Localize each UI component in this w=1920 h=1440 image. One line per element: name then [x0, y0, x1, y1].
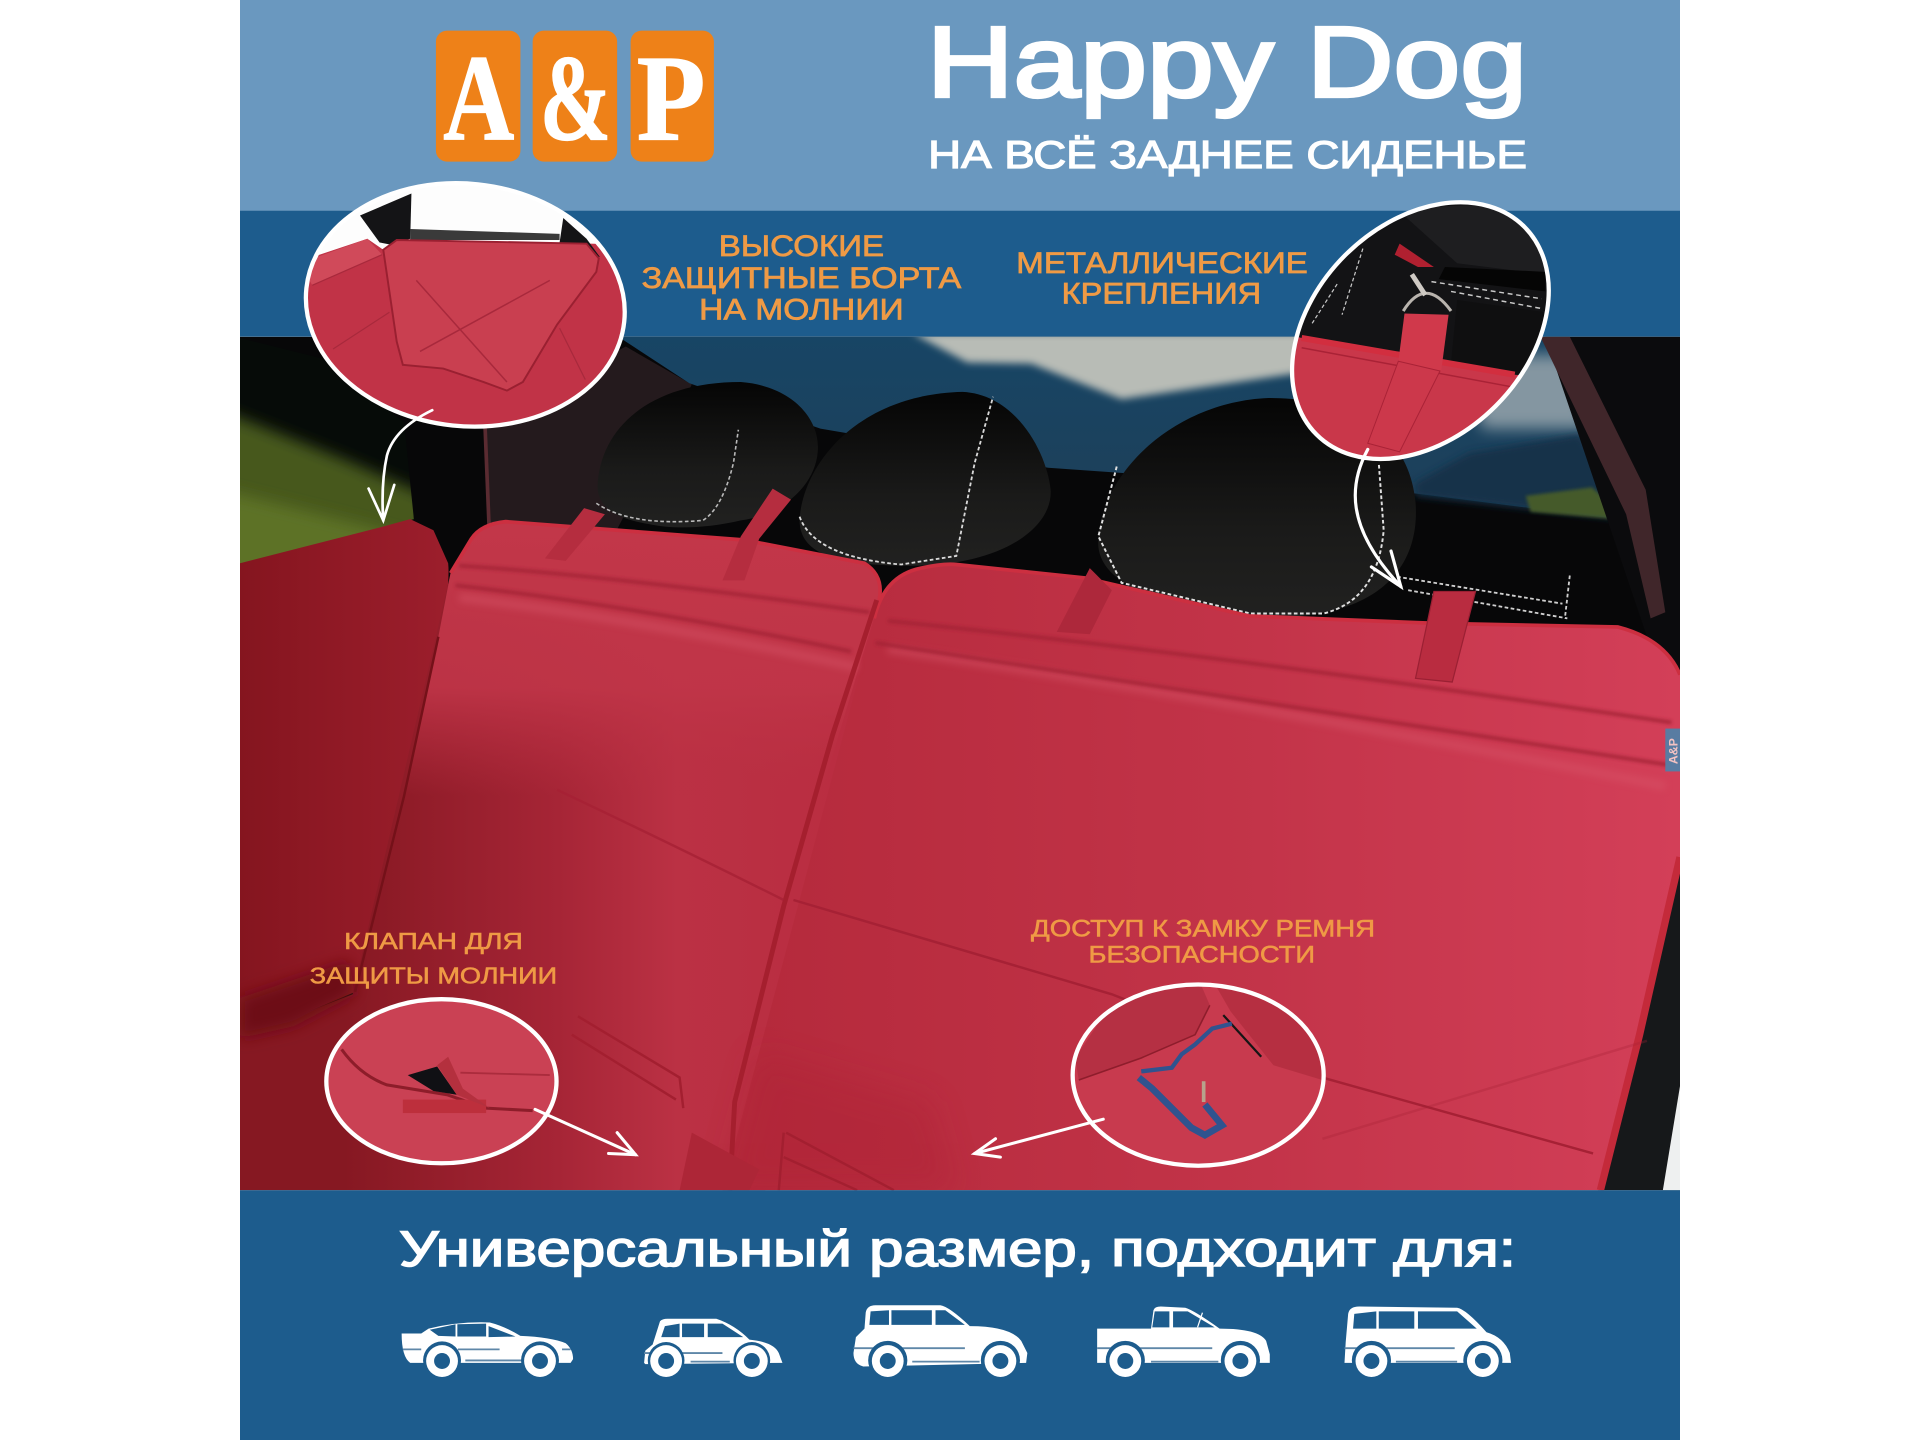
headrest left — [596, 382, 818, 527]
curved arrow: metal fastener — [1355, 449, 1401, 587]
red cover: side panel — [240, 519, 449, 1041]
black door edge — [1598, 845, 1680, 1190]
red cover: centre seat — [240, 522, 880, 1190]
icon: sedan — [402, 1322, 573, 1379]
headrest right — [1098, 398, 1416, 617]
feature text: high zip sides — [642, 230, 962, 327]
infographic canvas — [240, 0, 1680, 1440]
photo: rear seat with red cover — [220, 333, 1681, 1190]
white corner — [1663, 1086, 1680, 1190]
quilt lines — [355, 637, 1647, 1153]
feature text: metal fasteners: МЕТАЛЛИЧЕСКИЕ — [1016, 247, 1308, 280]
clouds — [912, 333, 1347, 399]
title: Happy Dog — [927, 7, 1527, 119]
callout circle: high side panel — [304, 181, 627, 429]
right seat strap left — [1057, 568, 1112, 634]
icon: hatchback — [644, 1319, 782, 1379]
caption: zipper flap — [310, 928, 557, 988]
right window haze — [1469, 355, 1592, 429]
curved arrow: side panel — [369, 410, 432, 520]
icon: van — [1344, 1307, 1511, 1380]
callout circle: seat belt access — [1065, 980, 1335, 1176]
caption: seat belt access: ДОСТУП К ЗАМКУ РЕМНЯ — [1031, 916, 1375, 943]
seat back stitching — [1397, 576, 1570, 618]
feature band — [240, 211, 1680, 337]
brand tag: A&P — [1667, 738, 1681, 764]
seat folds — [456, 566, 1671, 765]
shaded lower seat — [722, 1053, 955, 1190]
red cover: right seat — [722, 564, 1680, 1190]
pockets and flaps — [572, 1016, 894, 1190]
strap on centre seat right — [722, 489, 791, 580]
feature text: metal fasteners — [1016, 247, 1308, 311]
icon: SUV — [853, 1305, 1027, 1380]
right window mountains — [1414, 435, 1635, 520]
logo A&P: & — [540, 32, 611, 167]
brand tag — [1665, 729, 1681, 771]
bottom heading: Универсальный размер, подходит для: — [399, 1221, 1516, 1277]
floor shadow — [240, 961, 355, 1038]
feature text: metal fasteners: КРЕПЛЕНИЯ — [1062, 278, 1261, 311]
logo A&P: P — [637, 32, 705, 167]
feature text: high zip sides: НА МОЛНИИ — [699, 294, 904, 327]
right pillar — [1546, 336, 1680, 522]
centre seat bright upper area — [410, 524, 878, 772]
logo A&P — [436, 31, 714, 167]
caption: zipper flap: ЗАЩИТЫ МОЛНИИ — [310, 962, 557, 988]
caption: zipper flap: КЛАПАН ДЛЯ — [344, 928, 523, 954]
zip between seats — [730, 600, 877, 1190]
left window landscape — [240, 406, 414, 564]
piping on seat edges — [451, 522, 1680, 1190]
seat fold highlights — [459, 598, 1665, 786]
caption: seat belt access: БЕЗОПАСНОСТИ — [1089, 941, 1315, 968]
right seat strap right — [1416, 591, 1476, 682]
feature text: high zip sides: ВЫСОКИЕ — [719, 230, 884, 263]
caption: seat belt access — [1031, 916, 1375, 968]
subtitle: НА ВСЁ ЗАДНЕЕ СИДЕНЬЕ — [928, 134, 1527, 177]
rear window sky — [618, 337, 1629, 520]
callout circle: zipper flap — [324, 997, 559, 1166]
left pillar — [485, 347, 692, 545]
bottom band — [240, 1190, 1680, 1440]
arrow: seat belt access — [975, 1119, 1103, 1157]
callout circle: metal carabiner — [1290, 200, 1551, 462]
car interior background — [240, 337, 1680, 1190]
feature text: high zip sides: ЗАЩИТНЫЕ БОРТА — [642, 262, 962, 295]
center flap — [680, 1133, 749, 1190]
logo A&P: A — [443, 32, 514, 167]
arrow: zipper flap — [535, 1109, 636, 1155]
top band — [240, 0, 1680, 211]
icon: pickup — [1097, 1307, 1270, 1380]
strap on centre seat left — [545, 508, 605, 561]
headrest centre — [800, 392, 1051, 566]
